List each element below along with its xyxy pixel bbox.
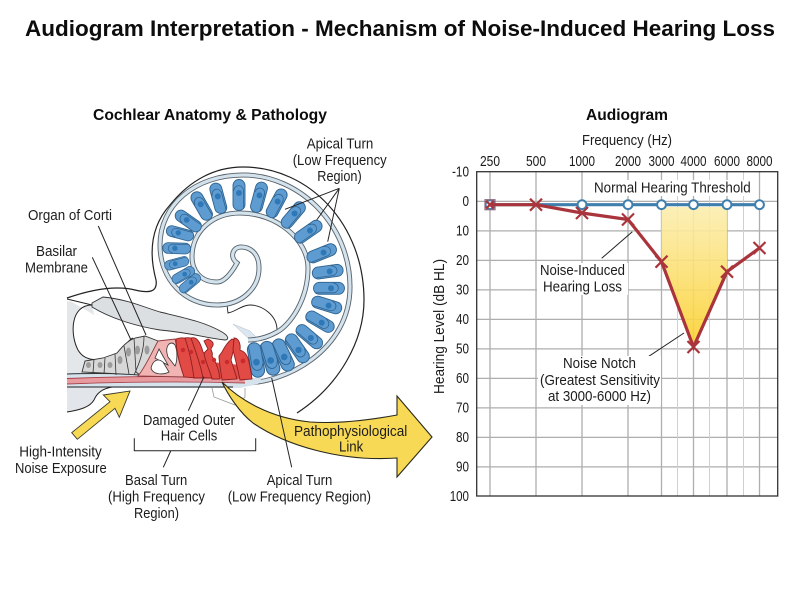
label: damaged outer hair cells: Damaged Outer xyxy=(143,412,235,429)
heading: cochlear anatomy: Cochlear Anatomy & Pathology xyxy=(93,107,327,124)
label: noise-induced hearing loss xyxy=(537,262,628,296)
leader: noise notch xyxy=(641,333,684,362)
label: organ of corti: Organ of Corti xyxy=(28,207,112,224)
hearing level tick labels: 70 xyxy=(456,400,469,417)
hearing level tick labels: 60 xyxy=(456,370,469,387)
frequency tick labels: 2000 xyxy=(615,153,641,170)
audiogram chart xyxy=(477,172,778,496)
label: noise notch xyxy=(538,355,661,405)
label: noise-induced hearing loss: Noise-Induced xyxy=(540,262,625,279)
leader: damaged cells xyxy=(188,377,204,411)
axis title: frequency: Frequency (Hz) xyxy=(582,132,672,149)
leader: apical turn lower xyxy=(272,378,292,467)
frequency tick labels: 1000 xyxy=(569,153,595,170)
leader: basilar membrane xyxy=(92,257,131,340)
label: noise-induced hearing loss: Hearing Loss xyxy=(543,279,622,296)
hearing level tick labels: 100 xyxy=(450,488,469,505)
label: damaged outer hair cells: Hair Cells xyxy=(161,428,217,445)
leaders: apical turn xyxy=(285,188,339,242)
hearing level tick labels: 50 xyxy=(456,341,469,358)
hearing level tick labels: -10 xyxy=(452,164,469,181)
organ of Corti supporting cells xyxy=(82,336,158,375)
label: apical turn lower: (Low Frequency Region) xyxy=(228,489,371,506)
heading: audiogram: Audiogram xyxy=(586,107,668,124)
label: basal turn: Basal Turn xyxy=(125,472,187,489)
label: basilar membrane: Basilar xyxy=(36,243,77,260)
thin grey outline under membrane xyxy=(212,388,245,405)
leader: organ of corti xyxy=(98,226,146,335)
red damaged outer hair cells xyxy=(176,338,252,380)
label: apical turn top: (Low Frequency xyxy=(293,152,387,169)
frequency tick labels: 6000 xyxy=(714,153,740,170)
lower wall line xyxy=(67,387,233,412)
plot frame xyxy=(477,172,778,496)
hearing level tick labels xyxy=(450,164,469,505)
label: basal turn: (High Frequency xyxy=(108,489,205,506)
hearing level tick labels: 80 xyxy=(456,429,469,446)
hearing level tick labels: 10 xyxy=(456,223,469,240)
hearing level tick labels: 30 xyxy=(456,282,469,299)
normal threshold line xyxy=(485,200,764,210)
hearing level tick labels: 0 xyxy=(462,193,469,210)
left grey chamber xyxy=(67,301,105,373)
label: basilar membrane: Membrane xyxy=(25,260,88,277)
hearing level tick labels: 40 xyxy=(456,311,469,328)
hearing level tick labels: 90 xyxy=(456,459,469,476)
arrow: pathophysiological link: Link xyxy=(339,439,364,456)
arrow: pathophysiological link: Pathophysiological xyxy=(294,423,407,440)
frequency tick labels: 8000 xyxy=(746,153,772,170)
frequency tick labels: 250 xyxy=(480,153,500,170)
label: damaged outer hair cells xyxy=(143,412,235,445)
label: high-intensity noise exposure: Noise Exposure xyxy=(15,460,107,477)
label: apical turn lower xyxy=(228,472,371,506)
blue healthy hair cells xyxy=(163,180,344,378)
lower bay outline xyxy=(227,305,277,330)
tectorial membrane xyxy=(92,297,228,340)
frequency tick labels: 3000 xyxy=(648,153,674,170)
label: apical turn top: Apical Turn xyxy=(307,135,373,152)
arrow: pathophysiological link xyxy=(222,382,432,477)
basilar membrane strip xyxy=(67,373,262,388)
blue wedge xyxy=(233,324,256,338)
title: Audiogram Interpretation - Mechanism of Noise-Induced Hearing Loss xyxy=(25,16,775,41)
frequency tick labels: 4000 xyxy=(680,153,706,170)
label: basal turn xyxy=(108,472,205,522)
lower grey scala xyxy=(67,387,110,412)
pink pillar region xyxy=(138,339,184,377)
label: noise notch: Noise Notch xyxy=(563,355,636,372)
bracket: basal turn xyxy=(134,438,256,467)
label: noise notch: (Greatest Sensitivity xyxy=(540,372,660,389)
round chamber outline xyxy=(67,299,133,360)
label: basilar membrane xyxy=(25,243,88,277)
label: high-intensity noise exposure: High-Intensity xyxy=(19,444,102,461)
arrow: noise exposure xyxy=(72,391,130,439)
frequency tick labels xyxy=(480,153,772,170)
hearing level tick labels: 20 xyxy=(456,252,469,269)
axis title: hearing level: Hearing Level (dB HL) xyxy=(431,259,448,394)
label: apical turn top: Region) xyxy=(317,168,362,185)
panel: cochlea diagram xyxy=(25,135,387,413)
noise notch shading xyxy=(662,207,727,347)
label: basal turn: Region) xyxy=(134,505,179,522)
label: normal hearing threshold: Normal Hearing Threshold xyxy=(594,180,751,197)
outer cochlea wall xyxy=(67,167,364,413)
label: apical turn top xyxy=(293,135,387,185)
spiral cochlear duct band xyxy=(160,175,350,383)
grid xyxy=(477,172,778,496)
frequency tick labels: 500 xyxy=(526,153,546,170)
label: noise notch: at 3000-6000 Hz) xyxy=(548,388,651,405)
label: apical turn lower: Apical Turn xyxy=(267,472,332,489)
noise-induced hearing loss line xyxy=(486,199,766,353)
leader: noise-induced hearing loss xyxy=(602,232,632,258)
label: high-intensity noise exposure xyxy=(15,444,107,477)
